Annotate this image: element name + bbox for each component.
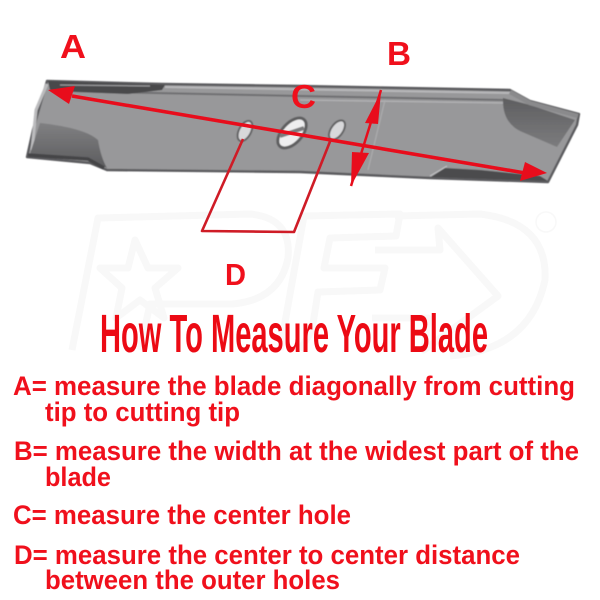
label B: B bbox=[387, 35, 411, 72]
blade body bbox=[27, 81, 579, 182]
label C: C bbox=[291, 78, 316, 115]
instruction D: D= measure the center to center distance bbox=[14, 540, 520, 570]
instruction D: between the outer holes bbox=[45, 565, 340, 595]
label D: D bbox=[225, 257, 246, 292]
instruction D bbox=[14, 540, 520, 595]
arrow B: width measurement bbox=[351, 90, 381, 186]
label A: A bbox=[60, 28, 86, 65]
light facets bbox=[368, 100, 385, 170]
arrow A: diagonal measurement bbox=[48, 86, 547, 181]
blade illustration bbox=[27, 81, 579, 182]
instructions bbox=[13, 371, 579, 595]
lower-right bevel bbox=[431, 168, 548, 181]
watermark logo bbox=[72, 212, 556, 356]
instruction A: tip to cutting tip bbox=[45, 397, 240, 427]
instruction A: A= measure the blade diagonally from cutting bbox=[13, 371, 575, 401]
upper-right cutting edge bbox=[503, 98, 575, 147]
instruction C: C= measure the center hole bbox=[13, 500, 351, 530]
blade holes bbox=[235, 113, 348, 153]
bracket D: hole spacing bbox=[202, 139, 331, 232]
instruction B: blade bbox=[45, 462, 111, 492]
top edge highlight bbox=[165, 87, 510, 93]
instruction A bbox=[13, 371, 575, 427]
instruction B: B= measure the width at the widest part of the bbox=[14, 436, 579, 466]
top-left dark bevel bbox=[48, 81, 165, 94]
lower-left cutting edge bbox=[30, 123, 107, 168]
instruction B bbox=[14, 436, 579, 492]
left end light strip bbox=[32, 84, 47, 150]
